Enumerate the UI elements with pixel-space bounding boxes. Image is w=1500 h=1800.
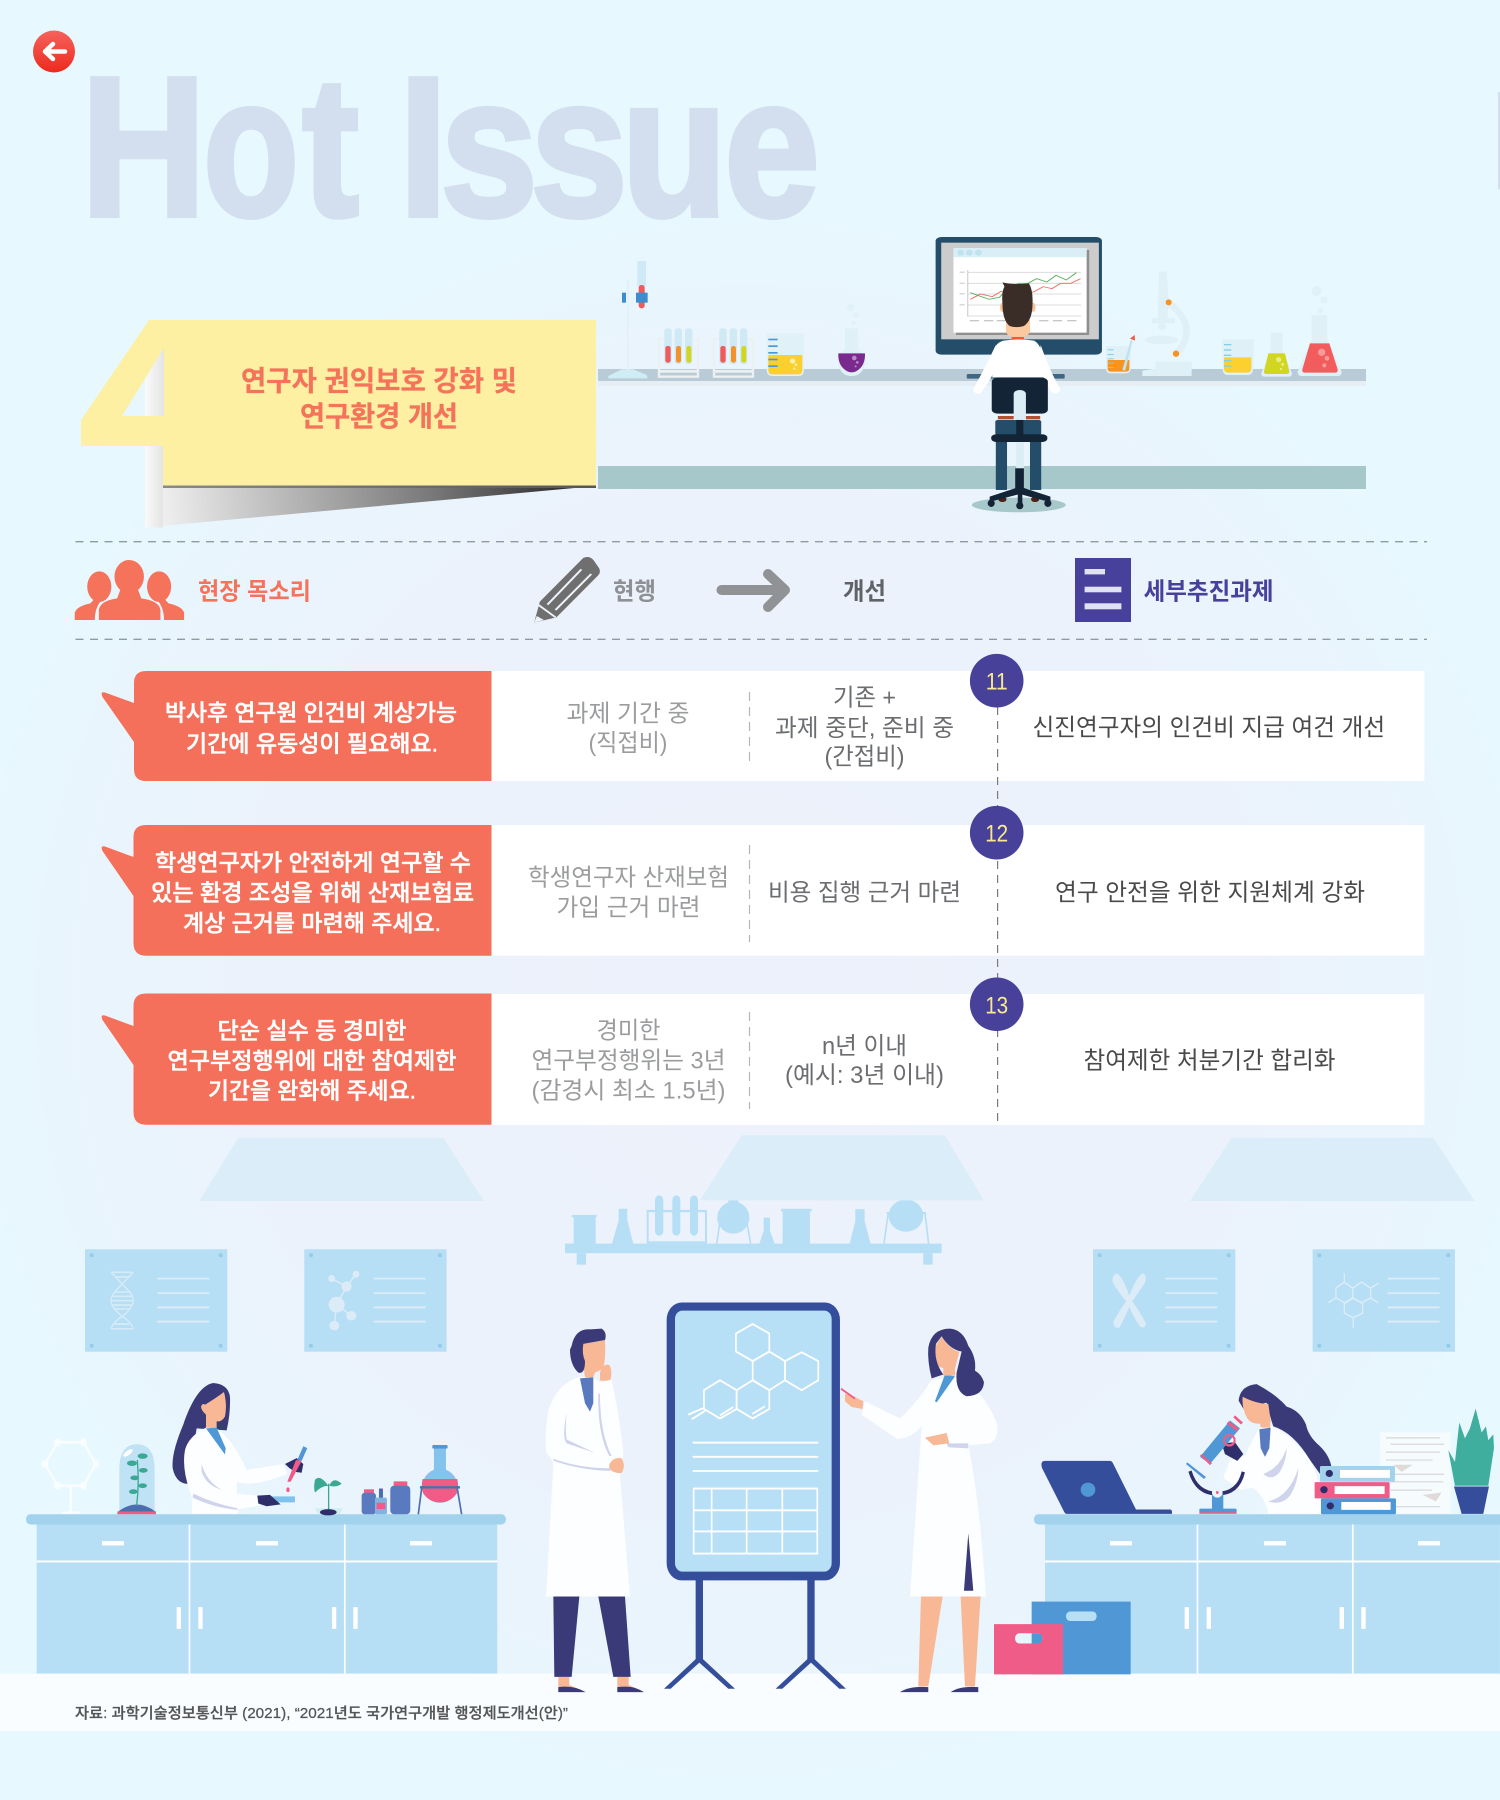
left lab equipment [608,261,865,378]
badge 11: 11 [986,668,1008,695]
improvement text: (간접비) [824,744,904,771]
current text: 연구부정행위는 3년 [532,1048,726,1075]
microscope [1186,1415,1243,1514]
section number 4 yellow ribbon [81,320,596,528]
fold [145,444,163,528]
section heading: 연구환경 개선 [300,401,458,432]
center lab scene [546,1135,997,1692]
right lab equipment [1106,272,1342,377]
laptop [1041,1461,1172,1514]
yellow numeral 4 and title plate [81,320,596,486]
field voice text [151,850,474,936]
right lab scene [994,1138,1500,1674]
label: 현행 [613,578,656,606]
title: Hot Issue: u [621,36,728,258]
male scientist [546,1329,644,1692]
speech bubble [102,994,492,1125]
badge 12: 12 [985,820,1008,847]
potted plant [1448,1409,1494,1514]
icon: pencil [534,557,600,623]
ceiling lamp right [1190,1138,1475,1201]
field voice text: 단순 실수 등 경미한 [218,1017,406,1043]
ceiling lamp left [199,1138,484,1201]
poster: molecule [304,1249,447,1352]
bottles [362,1481,410,1514]
ribbon shadow [145,486,596,528]
current text [566,701,690,757]
current text [532,1018,726,1105]
shelf of glassware silhouettes [565,1195,942,1265]
ceiling lamp center [700,1135,984,1200]
title: Hot Issue: s [530,36,628,258]
female scientist presenting [841,1329,997,1692]
current text [528,864,729,922]
improvement text [775,684,954,771]
current text: 과제 기간 중 [566,701,690,728]
poster: chromosome [1093,1249,1235,1352]
improvement text: 기존 + [833,684,896,711]
field voice text: 있는 환경 조성을 위해 산재보험료 [151,880,474,906]
task text: 신진연구자의 인건비 지급 여건 개선 [1032,715,1385,742]
title: Hot Issue: H [81,36,206,258]
section heading [241,366,517,432]
improvement text: (예시: 3년 이내) [785,1062,944,1089]
left lab scene [26,1138,506,1674]
label: 현장 목소리 [198,578,311,606]
row 2 [102,825,1424,956]
field voice text: 기간을 완화해 주세요. [208,1077,416,1103]
title: Hot Issue: o [203,36,299,258]
current text: 가입 근거 마련 [556,895,700,922]
icon: arrow current to improvement [722,574,785,607]
white row panel [491,825,1424,956]
scientist with dropper [173,1383,307,1514]
poster: DNA [85,1249,227,1352]
hexagon model [42,1438,99,1514]
speech bubble [102,671,492,781]
field voice text: 박사후 연구원 인건비 계상가능 [165,700,457,726]
title: Hot Issue: s [440,36,538,258]
column header: current [534,557,656,623]
source footnote: 자료: 과학기술정보통신부 (2021), “2021년도 국가연구개발 행정제도개선(안)” [75,1705,568,1722]
section heading: 연구자 권익보호 강화 및 [241,366,517,396]
improvement text: 과제 중단, 준비 중 [775,715,954,742]
storage boxes [994,1602,1131,1674]
current text: 경미한 [596,1018,660,1045]
current text: (감경시 최소 1.5년) [532,1078,726,1105]
right edge sliver [1498,92,1500,189]
field voice text: 연구부정행위에 대한 참여제한 [168,1047,456,1073]
improvement text: n년 이내 [822,1033,907,1060]
back button icon [33,30,75,72]
field voice text [168,1017,456,1103]
scientist at microscope [1223,1384,1332,1514]
lab scene: researcher at monitor [598,237,1366,512]
field voice text: 계상 근거를 마련해 주세요. [183,910,441,936]
flask on stand [418,1445,462,1514]
monitor and seated researcher [936,237,1102,512]
papers [1380,1432,1451,1514]
footer strip [0,1674,1500,1731]
badge 11 [970,654,1024,708]
bench base bar [598,466,1366,489]
presentation board [664,1303,846,1689]
badge 13 [970,978,1024,1031]
field voice text: 기간에 유동성이 필요해요. [186,730,438,756]
poster: hexagon molecule [1313,1249,1455,1352]
binders [1315,1466,1396,1514]
dashed divider [76,542,1427,639]
title: Hot Issue: t [302,36,359,258]
field voice text [165,700,457,756]
improvement text [785,1033,944,1089]
label: 세부추진과제 [1144,578,1274,606]
task text: 참여제한 처분기간 합리화 [1084,1048,1336,1075]
numeral counter [122,348,164,416]
badge 13: 13 [985,992,1008,1019]
left lab cabinet [26,1514,506,1674]
title: Hot Issue: I [399,36,448,258]
right lab cabinet [1034,1514,1500,1674]
current text: 학생연구자 산재보험 [528,864,729,891]
white row panel [491,671,1424,781]
current text: (직접비) [588,730,668,757]
speech bubble [102,825,492,956]
sprout [314,1478,343,1515]
column header: detailed tasks [1075,558,1274,622]
column header: field voices [75,560,311,620]
badge 12 [970,806,1024,860]
title: Hot Issue: e [724,36,820,258]
icon: people [75,560,184,620]
white row panel [491,994,1424,1125]
bench shelf [598,369,1366,386]
bell jar plant [117,1444,156,1514]
field voice text: 학생연구자가 안전하게 연구할 수 [155,850,471,876]
column header: improvement: 개선 [843,578,886,606]
row 1 [102,671,1424,781]
title: Hot Issue [81,36,820,258]
icon: document [1075,558,1131,622]
row 3 [102,994,1424,1125]
task text: 연구 안전을 위한 지원체계 강화 [1055,879,1365,906]
improvement text: 비용 집행 근거 마련 [768,879,961,906]
